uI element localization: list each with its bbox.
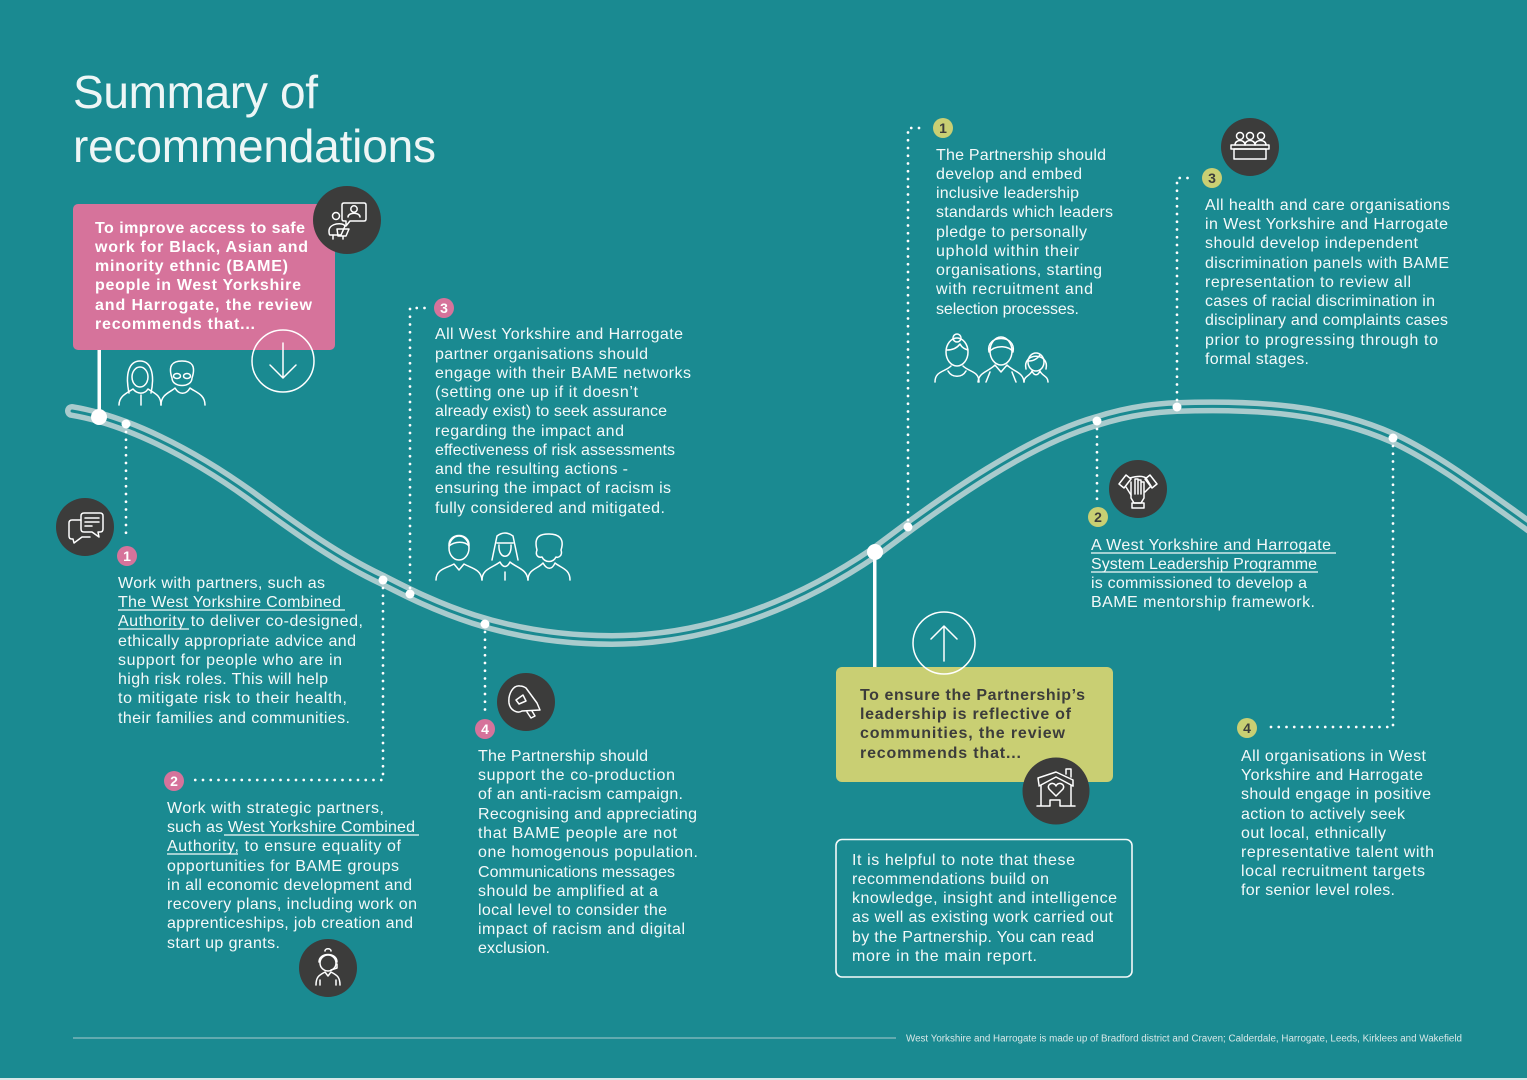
note text: recommendations build on: [852, 871, 1049, 888]
panel: green heading box: [836, 667, 1113, 782]
text: green recommendation 3: should develop independent: [1205, 235, 1419, 252]
dotted connector: pink 3: [410, 308, 426, 588]
number badge: green 4: [1237, 718, 1257, 738]
icon: three people: [436, 533, 570, 580]
text: pink recommendation 2: recovery plans, including work on: [167, 896, 417, 913]
text: pink recommendation 2: in all economic development and: [167, 877, 412, 894]
pink box text: work for Black, Asian and: [94, 239, 308, 256]
text: pink recommendation 4: exclusion.: [478, 940, 550, 957]
icon: headset worker: [299, 939, 357, 997]
number badge: green 4: 4: [1243, 720, 1251, 736]
dotted connector: pink 1: [125, 432, 127, 540]
note text: It is helpful to note that these: [852, 852, 1075, 869]
title: Summary of: [73, 66, 318, 118]
number badge: pink 3: 3: [440, 300, 448, 316]
icon: megaphone: [497, 673, 555, 731]
text: green recommendation 2: is commissioned to develop a: [1091, 575, 1307, 592]
pink box text: To improve access to safe: [95, 220, 305, 237]
dotted connector: green 4: [1266, 446, 1393, 727]
text: pink recommendation 2: start up grants.: [167, 935, 280, 952]
text: pink recommendation 4: Recognising and appreciating: [478, 806, 697, 823]
icon: joined hands: [1109, 460, 1167, 518]
panel: pink heading box: [73, 204, 335, 350]
text: pink recommendation 2: such as West Yorkshire Combined: [167, 819, 415, 836]
text: pink recommendation 3: engage with their BAME networks: [435, 365, 691, 382]
text: pink recommendation 3: partner organisations should: [435, 346, 648, 363]
number badge: pink 3: [434, 298, 454, 318]
text: pink recommendation 3: and the resulting actions -: [435, 461, 628, 478]
text: pink recommendation 3: [435, 326, 691, 517]
number badge: pink 4: 4: [481, 721, 489, 737]
text: green recommendation 4: [1241, 748, 1434, 899]
text: pink recommendation 3: All West Yorkshire and Harrogate: [435, 326, 683, 343]
icon: family of three: [935, 334, 1048, 382]
number badge: pink 1: [117, 546, 137, 566]
footer rule: [73, 1037, 896, 1039]
text: green recommendation 2: A West Yorkshire and Harrogate: [1091, 537, 1331, 554]
text: pink recommendation 4: impact of racism and digital: [478, 921, 685, 938]
text: green recommendation 4: All organisations in West: [1241, 748, 1427, 765]
text: green recommendation 4: for senior level roles.: [1241, 882, 1395, 899]
dotted connector: green 1: [908, 128, 925, 520]
text: green recommendation 4: should engage in positive: [1241, 786, 1431, 803]
text: pink recommendation 3: (setting one up if it doesn’t: [435, 384, 639, 401]
text: green recommendation 3: prior to progressing through to: [1205, 332, 1438, 349]
dotted connector: green 3: [1177, 178, 1194, 400]
text: pink recommendation 1: Work with partners, such as: [118, 575, 325, 592]
number badge: green 3: 3: [1208, 170, 1216, 186]
text: pink recommendation 4: local level to consider the: [478, 902, 667, 919]
note text: [852, 852, 1117, 965]
pink box text: minority ethnic (BAME): [95, 258, 288, 275]
text: green recommendation 2: System Leadership Programme: [1091, 556, 1317, 573]
icon: chat bubbles: [56, 498, 114, 556]
text: pink recommendation 1: ethically appropriate advice and: [118, 633, 356, 650]
text: pink recommendation 1: high risk roles. This will help: [118, 671, 328, 688]
footer note: West Yorkshire and Harrogate is made up of Bradford district and Craven; Calderdale, Harrogate, Leeds, Kirklees and Wakefield: [906, 1034, 1462, 1044]
text: pink recommendation 4: should be amplified at a: [478, 883, 658, 900]
text: pink recommendation 3: already exist) to seek assurance: [435, 403, 667, 420]
text: pink recommendation 4: [478, 748, 698, 957]
pink box text: recommends that...: [95, 316, 255, 333]
stem: green box to road: [873, 552, 876, 669]
text: pink recommendation 1: to mitigate risk to their health,: [118, 690, 347, 707]
text: green recommendation 3: discrimination panels with BAME: [1205, 255, 1449, 272]
text: pink recommendation 1: Authority to deliver co-designed,: [118, 613, 363, 630]
number badge: green 2: [1088, 507, 1108, 527]
green box text: [860, 687, 1085, 762]
stem: pink box to road: [98, 348, 101, 418]
text: green recommendation 1: organisations, starting: [936, 262, 1102, 279]
title: [73, 66, 436, 172]
green box text: communities, the review: [860, 725, 1066, 742]
text: green recommendation 1: selection processes.: [936, 301, 1079, 318]
text: pink recommendation 2: apprenticeships, job creation and: [167, 915, 413, 932]
green box text: To ensure the Partnership’s: [860, 687, 1085, 704]
note text: more in the main report.: [852, 948, 1037, 965]
text: green recommendation 3: cases of racial discrimination in: [1205, 293, 1435, 310]
text: pink recommendation 3: effectiveness of risk assessments: [435, 442, 675, 459]
text: green recommendation 1: inclusive leadership: [936, 185, 1079, 202]
text: pink recommendation 1: [118, 575, 363, 727]
title: recommendations: [73, 120, 436, 172]
text: pink recommendation 3: regarding the impact and: [435, 423, 624, 440]
text: pink recommendation 4: of an anti-racism campaign.: [478, 786, 683, 803]
icon: house with heart: [1022, 758, 1090, 824]
pink box text: people in West Yorkshire: [95, 277, 301, 294]
text: green recommendation 3: [1205, 197, 1450, 368]
text: pink recommendation 4: support the co-production: [478, 767, 675, 784]
icon: coaching conversation: [313, 186, 381, 254]
number badge: pink 1: 1: [123, 548, 131, 564]
text: green recommendation 3: disciplinary and complaints cases: [1205, 312, 1448, 329]
text: green recommendation 1: The Partnership should: [936, 147, 1106, 164]
dotted connector: green 2: [1096, 429, 1098, 503]
text: green recommendation 1: with recruitment and: [935, 281, 1093, 298]
pink box text: [94, 220, 313, 333]
note text: as well as existing work carried out: [852, 909, 1114, 926]
timeline road curve: [72, 406, 1527, 640]
text: pink recommendation 2: [167, 800, 419, 952]
text: green recommendation 4: local recruitment targets: [1241, 863, 1425, 880]
text: pink recommendation 1: support for people who are in: [118, 652, 342, 669]
number badge: green 3: [1202, 168, 1222, 188]
number badge: green 2: 2: [1094, 509, 1102, 525]
text: green recommendation 1: pledge to personally: [936, 224, 1087, 241]
note text: by the Partnership. You can read: [852, 929, 1094, 946]
text: pink recommendation 1: their families and communities.: [118, 710, 350, 727]
pink box text: and Harrogate, the review: [95, 297, 313, 314]
icon: up arrow circle: [913, 612, 975, 674]
text: green recommendation 4: out local, ethnically: [1241, 825, 1386, 842]
number badge: green 1: 1: [939, 120, 947, 136]
text: pink recommendation 2: opportunities for BAME groups: [167, 858, 399, 875]
text: pink recommendation 4: one homogenous population.: [478, 844, 698, 861]
text: green recommendation 4: representative talent with: [1241, 844, 1434, 861]
number badge: green 1: [933, 118, 953, 138]
number badge: pink 2: 2: [170, 773, 178, 789]
text: green recommendation 1: develop and embed: [936, 166, 1082, 183]
text: green recommendation 3: formal stages.: [1205, 351, 1309, 368]
text: green recommendation 4: Yorkshire and Harrogate: [1241, 767, 1423, 784]
text: pink recommendation 4: The Partnership should: [478, 748, 648, 765]
text: pink recommendation 2: Authority, to ensure equality of: [167, 838, 402, 855]
text: green recommendation 3: in West Yorkshire and Harrogate: [1205, 216, 1448, 233]
dotted connector: pink 4: [484, 632, 486, 714]
text: green recommendation 1: [935, 147, 1113, 318]
text: green recommendation 3: All health and care organisations: [1205, 197, 1450, 214]
green box text: leadership is reflective of: [860, 706, 1072, 723]
number badge: pink 4: [475, 719, 495, 739]
text: green recommendation 1: standards which leaders: [936, 204, 1113, 221]
icon: down arrow circle: [252, 330, 314, 392]
text: green recommendation 2: BAME mentorship framework.: [1091, 594, 1315, 611]
text: green recommendation 2: [1091, 537, 1336, 611]
dotted connector: pink 2: [190, 588, 383, 780]
text: pink recommendation 4: that BAME people are not: [478, 825, 678, 842]
text: pink recommendation 3: fully considered and mitigated.: [435, 500, 665, 517]
icon: two people, hijab and glasses: [119, 361, 205, 405]
text: green recommendation 3: representation to review all: [1205, 274, 1411, 291]
note text: knowledge, insight and intelligence: [852, 890, 1117, 907]
text: pink recommendation 3: ensuring the impact of racism is: [435, 480, 671, 497]
green box text: recommends that...: [860, 745, 1021, 762]
text: pink recommendation 2: Work with strategic partners,: [167, 800, 384, 817]
icon: discrimination panel: [1221, 118, 1279, 176]
text: green recommendation 1: uphold within their: [936, 243, 1080, 260]
text: pink recommendation 4: Communications messages: [478, 864, 675, 881]
text: green recommendation 4: action to actively seek: [1241, 806, 1406, 823]
road markers: [91, 402, 1398, 628]
text: pink recommendation 1: The West Yorkshire Combined: [118, 594, 341, 611]
number badge: pink 2: [164, 771, 184, 791]
panel: note box: [836, 840, 1132, 977]
